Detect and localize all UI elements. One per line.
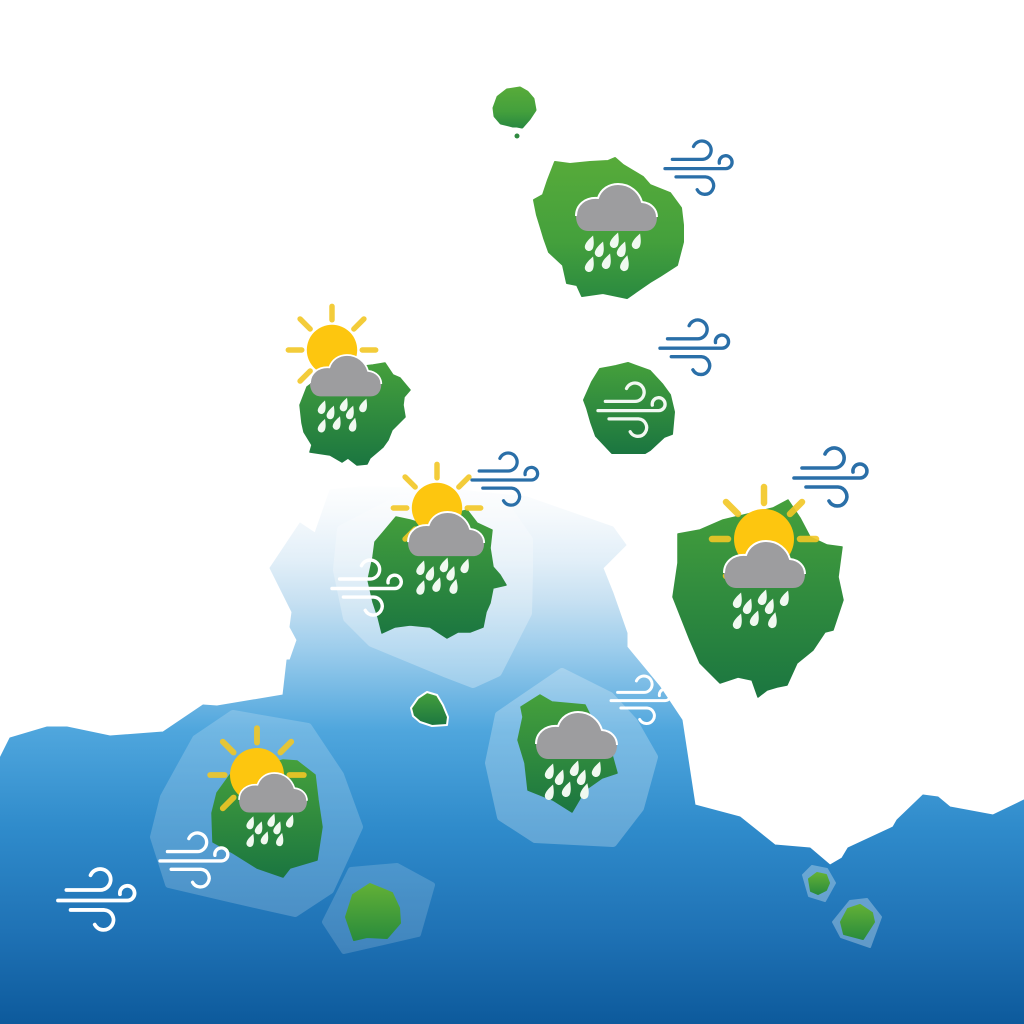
island: left (300, 363, 410, 465)
icon: rain cloud on large right island (724, 541, 805, 630)
icon: wind on middle island (598, 383, 665, 436)
icon: rain cloud on left island (310, 355, 381, 433)
halo: bottom right islet one (803, 866, 835, 901)
island: top large (534, 158, 683, 298)
icon: sun on centre island (393, 464, 481, 539)
icon: wind above large right island (794, 448, 867, 506)
icon: sun on lower left island (210, 728, 304, 808)
island: small top islet (494, 88, 535, 138)
sea with coastline (0, 487, 1024, 1024)
island: bottom right islet one (809, 873, 829, 894)
icon: rain cloud on centre island (408, 512, 484, 596)
island: bottom right islet two (841, 905, 874, 939)
icon: wind at coast (611, 676, 671, 724)
icon: rain cloud on top island (576, 184, 657, 273)
halo: bottom island shallows (325, 866, 432, 951)
icon: wind beside top island (665, 141, 732, 194)
island: lower middle (518, 695, 617, 812)
halo: lower middle island shallows (489, 672, 654, 843)
island: middle round (584, 363, 674, 453)
island: lower left (212, 760, 322, 877)
icon: wind on lower left island (160, 833, 228, 887)
island: tiny outlined islet (411, 692, 448, 726)
island: large right (673, 500, 843, 697)
icon: wind on centre island (332, 560, 401, 615)
icon: rain cloud on lower middle island (536, 712, 617, 801)
icon: rain cloud on lower left island (239, 773, 307, 848)
icon: sun on large right island (712, 487, 816, 576)
island: bottom (346, 884, 400, 940)
halo: centre island shallows (338, 500, 528, 683)
halo: bottom right islet two (833, 899, 881, 947)
icon: wind beside centre sun (472, 453, 538, 505)
icon: wind above middle island (660, 320, 729, 374)
icon: sun on left island (288, 306, 376, 381)
halo: lower left island shallows (154, 714, 359, 913)
island: centre (368, 510, 506, 638)
icon: wind over open sea (58, 869, 135, 930)
